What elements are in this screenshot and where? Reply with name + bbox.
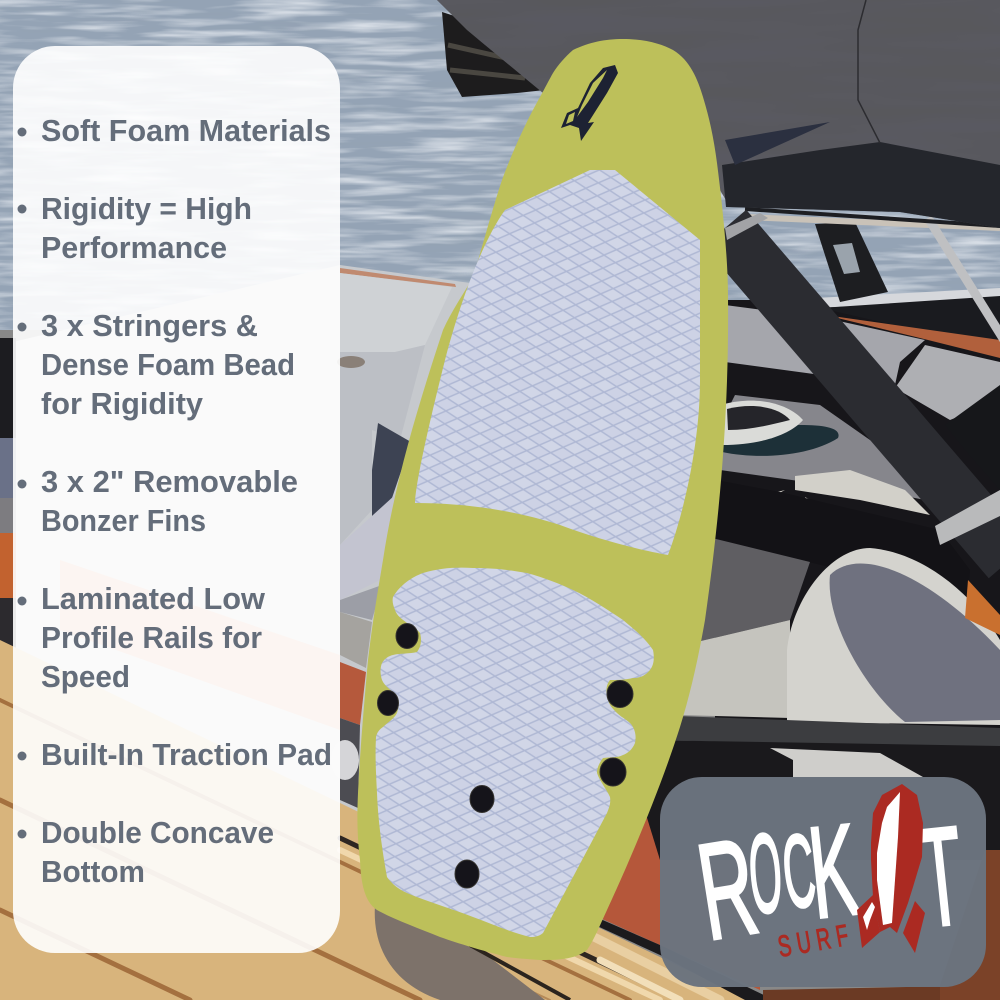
bullet list: Rigidity = High (41, 191, 252, 226)
right-hand orange hull (940, 850, 1000, 1000)
logo SURF: SURF (775, 918, 857, 964)
bullet list: Built-In Traction Pad (41, 737, 332, 772)
black tower speaker (442, 12, 545, 97)
boat cover (437, 0, 1000, 228)
logo wordmark: C (777, 811, 820, 930)
logo wordmark: R (689, 810, 766, 969)
logo rocket (857, 784, 925, 953)
board deck (357, 39, 728, 960)
bullet list: Bonzer Fins (41, 503, 206, 538)
fin plugs (378, 624, 633, 888)
logo wordmark (689, 797, 971, 969)
bullet list: Bottom (41, 854, 145, 889)
panel: feature list (13, 46, 340, 953)
dark bars below the seat (640, 715, 1000, 860)
water (0, 0, 1000, 330)
logo wordmark: O (745, 810, 786, 937)
orange hull (580, 790, 1000, 1000)
boat interior, right of the board (678, 288, 1000, 730)
rear traction pad (376, 568, 654, 937)
logo wordmark: K (803, 797, 865, 946)
wakeboard on the table (722, 401, 839, 456)
logo panel (660, 777, 986, 987)
board logo rocket (561, 65, 618, 141)
bullet list: 3 x 2" Removable (41, 464, 298, 499)
orange panel behind the seat (965, 580, 1000, 635)
front traction pad (415, 170, 700, 555)
bullet list: Performance (41, 230, 227, 265)
bullet list: Double Concave (41, 815, 274, 850)
left edge of the boat (0, 338, 16, 653)
canopy frame (745, 209, 1000, 340)
bullet list (18, 113, 332, 889)
roll bar pole (725, 213, 1000, 560)
bullet list: Dense Foam Bead (41, 347, 295, 382)
bullet list: Speed (41, 659, 130, 694)
wooden dock (0, 640, 750, 1000)
surfboard (357, 39, 728, 960)
grey seat (787, 548, 1000, 725)
bullet list: Profile Rails for (41, 620, 262, 655)
boat deck and seating, left of the board (0, 265, 470, 1000)
bullet list: Soft Foam Materials (41, 113, 331, 148)
bullet list: for Rigidity (41, 386, 204, 421)
bullet list: 3 x Stringers & (41, 308, 258, 343)
bullet list: Laminated Low (41, 581, 266, 616)
logo wordmark: T (912, 798, 971, 957)
